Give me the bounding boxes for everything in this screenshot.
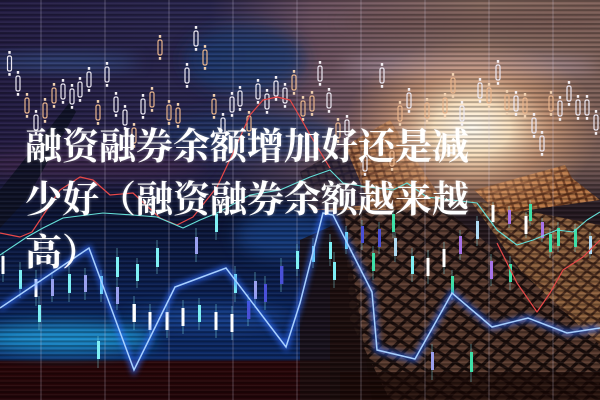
- building grid: upper centre tower: [300, 120, 442, 210]
- title: 融资融券余额增加好还是减: [25, 127, 469, 168]
- blue glowing polyline: [0, 213, 600, 370]
- building grid: lower right floors: [300, 200, 600, 400]
- teal trend line: [0, 170, 600, 255]
- building grid: right rooftop: [474, 165, 600, 214]
- title: 少好（融资融券余额越来越: [25, 180, 469, 221]
- central warm light glow: [344, 40, 600, 216]
- title: [25, 126, 469, 274]
- lower solid candlesticks: [2, 200, 592, 382]
- upper hollow candlesticks: [8, 26, 598, 176]
- dark diagonal building wedge: [0, 102, 76, 228]
- red trend line: [0, 97, 600, 312]
- title: 高）: [25, 233, 99, 274]
